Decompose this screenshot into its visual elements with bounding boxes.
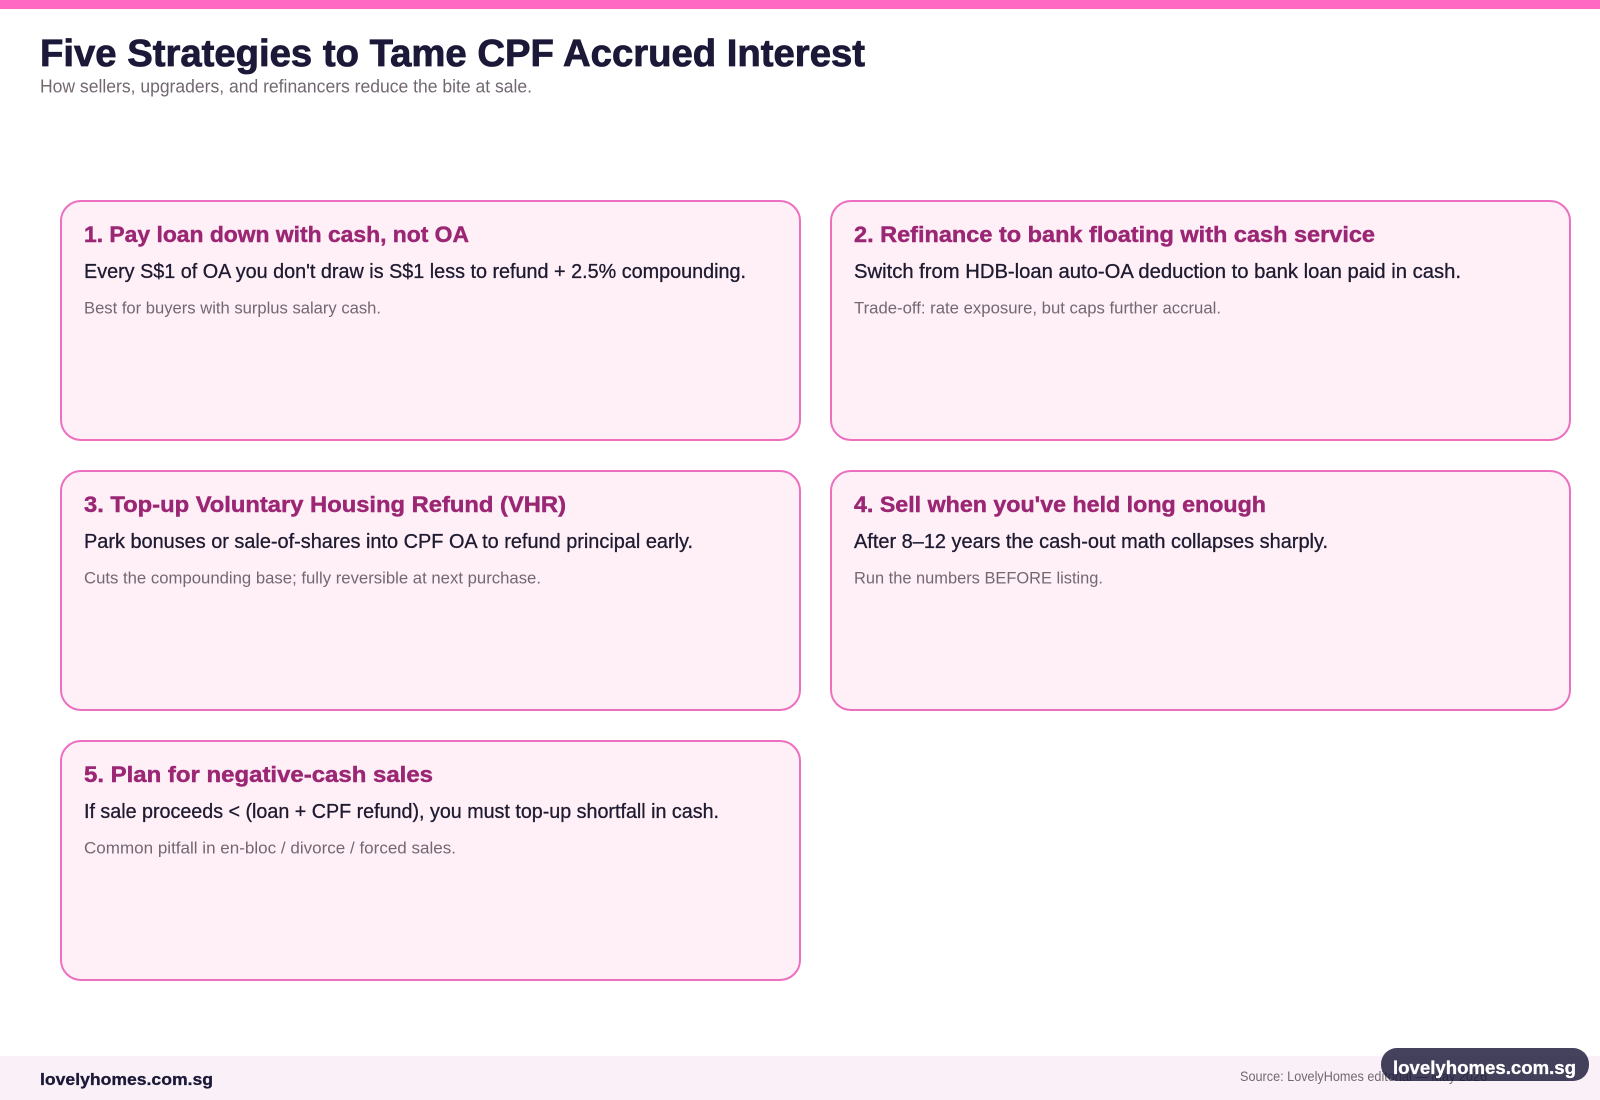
panel: strategy 1: [61, 201, 800, 440]
text: strategy 2 detail: Switch from HDB-loan auto-OA deduction to bank loan paid in cash.: [854, 261, 1461, 283]
panel: strategy 5: [61, 741, 800, 980]
heading: strategy 4: 4. Sell when you've held long enough: [854, 492, 1266, 517]
note: strategy 3: Cuts the compounding base; fully reversible at next purchase.: [84, 570, 541, 588]
text: strategy 5 detail: If sale proceeds < (loan + CPF refund), you must top-up shortfall in cash.: [84, 801, 719, 823]
heading: strategy 5: 5. Plan for negative-cash sales: [84, 762, 433, 787]
note: strategy 5: Common pitfall in en-bloc / divorce / forced sales.: [84, 840, 456, 858]
note: strategy 1: Best for buyers with surplus salary cash.: [84, 300, 381, 318]
text: strategy 4 detail: After 8–12 years the cash-out math collapses sharply.: [854, 531, 1328, 553]
text: strategy 3 detail: Park bonuses or sale-of-shares into CPF OA to refund principal early.: [84, 531, 693, 553]
panel: strategy 4: [831, 471, 1570, 710]
panel: strategy 2: [831, 201, 1570, 440]
panel: strategy 3: [61, 471, 800, 710]
footer brand: lovelyhomes.com.sg: [40, 1070, 213, 1089]
top accent bar: [0, 0, 1600, 9]
note: strategy 2: Trade-off: rate exposure, but caps further accrual.: [854, 300, 1221, 318]
text: strategy 1 detail: Every S$1 of OA you don't draw is S$1 less to refund + 2.5% compounding.: [84, 261, 746, 283]
heading: strategy 3: 3. Top-up Voluntary Housing Refund (VHR): [84, 492, 566, 517]
footer band: [0, 1056, 1600, 1100]
watermark pill: [1381, 1048, 1589, 1081]
footer source: Source: LovelyHomes editorial — May 2026: [1240, 1069, 1487, 1084]
heading: strategy 2: 2. Refinance to bank floating with cash service: [854, 222, 1375, 247]
subtitle: How sellers, upgraders, and refinancers reduce the bite at sale.: [40, 76, 532, 96]
note: strategy 4: Run the numbers BEFORE listing.: [854, 570, 1103, 588]
title: Five Strategies to Tame CPF Accrued Interest: [40, 33, 865, 75]
heading: strategy 1: 1. Pay loan down with cash, not OA: [84, 222, 469, 247]
watermark text: lovelyhomes.com.sg: [1393, 1057, 1576, 1078]
